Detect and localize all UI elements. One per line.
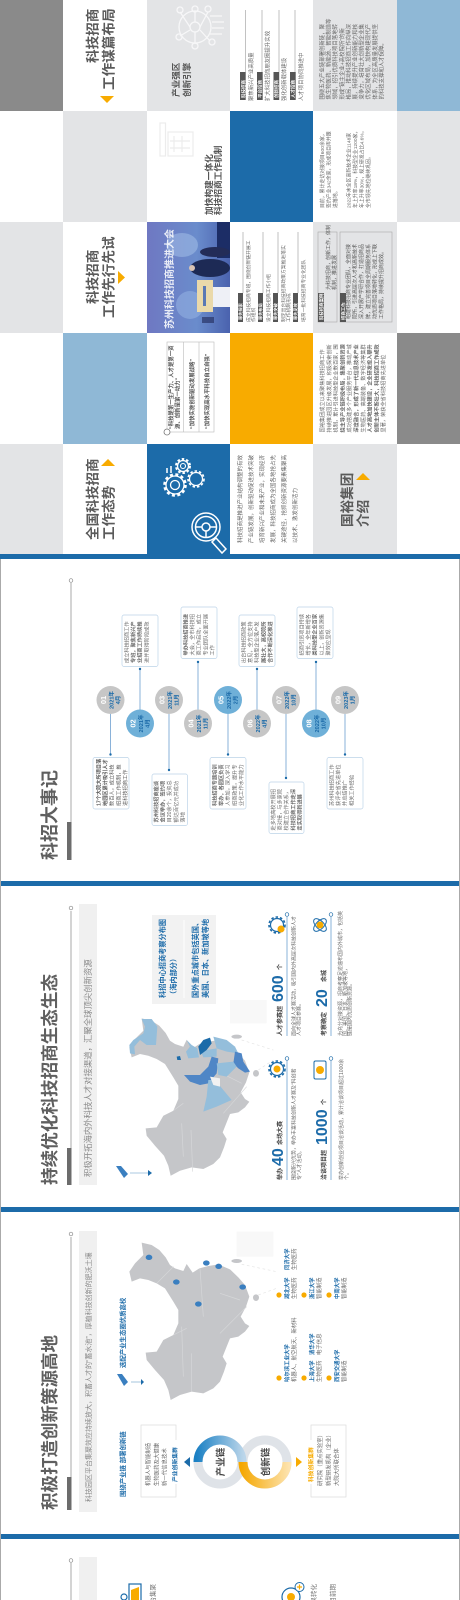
- quote panel: 三句话: [164, 342, 214, 435]
- event card 07: 科技招商工作走深: [289, 788, 297, 830]
- event card 03: [152, 774, 188, 826]
- list: 先行先试 four items: 制定出台科技招商政策方案推进落实: [280, 245, 287, 322]
- text block: 谋篇布局: 优化区域布局，加快构建现代产: [364, 24, 372, 100]
- panel: 加快构建一体化科技招商工作机制: [160, 123, 223, 215]
- text block: 谋篇布局: 的科技支撑和人才保障。: [377, 40, 385, 100]
- section: 持续优化科技招商生态: [40, 904, 354, 1185]
- node 08: [302, 710, 330, 738]
- panel: 先行先试案例: 招商工作: [340, 302, 347, 320]
- icon: atom: [312, 917, 328, 933]
- stat: 考察确定: 考察确定: [320, 1012, 328, 1036]
- node 05: [214, 686, 242, 714]
- box: 科技创新集群: 大院大所联合体: [333, 1448, 341, 1486]
- university list: 清华大学: [308, 1333, 316, 1355]
- arrow: blue left: [184, 1457, 190, 1467]
- panel: 先行先试案例: 深入开展产学研合作，打造招商品: [358, 244, 365, 319]
- subtitle strip: 积极开拓海内外科技人才对接渠道，汇聚全球顶尖创新资源: [83, 959, 93, 1177]
- node 09: [331, 686, 359, 714]
- heading: 科技招商工作先行先试: [84, 236, 125, 318]
- icon: gear with star: [269, 917, 285, 933]
- stat: 洽谈项目: 个。: [345, 1170, 351, 1180]
- title: 积极打造创新策源高地: [40, 1335, 60, 1510]
- event card 02: 进并取得阶段成效: [142, 621, 150, 663]
- node 03: 2021年: [166, 691, 174, 709]
- box: 科技创新集群: 研究院（重点实验室）: [316, 1432, 324, 1486]
- chain diagram: [184, 1440, 302, 1484]
- node 01: [96, 686, 124, 714]
- stat: 考察确定: 国、美国、日本、新加坡等地，: [342, 966, 349, 1036]
- university list: 湖北大学: [283, 1277, 291, 1299]
- panel: 产业强区创新引擎: [170, 6, 224, 97]
- section: 科招大事记: [40, 579, 363, 860]
- event card 09: [327, 758, 363, 809]
- map: 高校分布: [117, 1232, 277, 1400]
- text block: 国裕集团说明: 生物医药、高端装备、数字经济等集群: [359, 344, 367, 432]
- event card 09: 并总结推广: [341, 780, 349, 806]
- panel: 产业强区创新引擎: 创新引擎: [181, 62, 192, 97]
- event card 04: [181, 607, 217, 658]
- node 03: [155, 686, 183, 714]
- box: 产业创新集群: 产业创新集群: [171, 1447, 179, 1482]
- list: 产业强区 four items: 平台招商: [256, 80, 264, 98]
- stat: 举办大赛: 举办: [276, 1168, 284, 1180]
- box: 产业创新集群: [141, 1425, 179, 1497]
- icon: circle plus: [282, 1582, 304, 1600]
- university list: 生物医药: [290, 1277, 298, 1299]
- box: 产业创新集群: 机器人与智能制造: [144, 1442, 152, 1486]
- heading: 国裕集团介绍: 国裕集团: [339, 473, 355, 527]
- panel: 先行先试案例: 科技招商案例: [318, 293, 325, 320]
- event card 05: [210, 758, 246, 809]
- event card 08: 以上，创新资源集: [317, 613, 325, 656]
- text block: 谋篇布局: 焦生物医药、新能源、智能制造等: [325, 18, 333, 100]
- stat: 洽谈项目: [314, 1057, 351, 1180]
- stat: 考察确定: 余城: [320, 970, 328, 982]
- list: 先行先试 four items: 作组织: [250, 307, 257, 322]
- university list: 哈尔滨工业大学: [283, 1344, 291, 1382]
- text block: 谋篇布局: 围绕五大产业链部署创新链，聚: [318, 23, 326, 100]
- text block: 国裕集团说明: 深度融合，形成了新一代信息技术产业: [352, 344, 360, 432]
- node 07: [272, 686, 300, 714]
- event card 01: 地园区累计吸引人才: [101, 759, 109, 806]
- quote panel: 三句话: 源、创新是第一动力”: [173, 377, 181, 429]
- node 03: 11月: [174, 694, 180, 706]
- stat: 洽谈项目: 举办创新创业项目洽谈活动，累计洽谈项目超过1000余: [338, 1059, 345, 1180]
- event card 04: 商工作启动，成立: [195, 614, 203, 656]
- box: 科技创新集群: 科技创新集群: [307, 1447, 315, 1482]
- event card 06: 科技型企业落户发: [253, 621, 261, 663]
- event card 08: 招商引资项目持续: [298, 614, 306, 656]
- stat: 举办大赛: 余场大赛: [276, 1121, 284, 1145]
- text block: 谋篇布局: 展，持续提升产业创新能力和核: [351, 23, 359, 100]
- section: 底部栏目: [69, 1557, 337, 1600]
- quote panel: 三句话: “加快实现高水平科技自立自强”: [203, 353, 211, 429]
- icon: map pin with arrow: [116, 1166, 152, 1178]
- event card 01: 数百人，成立科技: [108, 764, 116, 806]
- node 05: 2月: [232, 696, 240, 704]
- text block: 全国态势: 科技招商是推进产业结构调整的有效: [236, 454, 244, 543]
- university list: 西安交通大学: [333, 1349, 341, 1382]
- text block: 国裕集团说明: 人才高地加快建设，企业研发投入攀升: [366, 344, 374, 432]
- title rule: [67, 579, 73, 860]
- panel: 先行先试案例: 工作格局，持续提升招商成效。: [378, 249, 385, 319]
- text block: 国裕集团说明: 创新主体不断壮大，科技招商工作成效: [372, 343, 380, 432]
- event card 03: 苏州科技招商座谈: [152, 780, 160, 822]
- section dividers: [0, 554, 460, 1539]
- event card 05: 举办，各园区负责: [217, 764, 225, 806]
- node 05: 05: [216, 696, 226, 704]
- node 07: 07: [274, 696, 284, 704]
- legend panel: [152, 915, 216, 1004]
- event card 02: [122, 615, 158, 666]
- text block: 国裕集团说明: 国裕集团成立以来聚焦科技招商工作: [318, 349, 326, 432]
- text block: 国裕集团说明: 显著，荣获全省科技招商先进单位: [379, 355, 387, 432]
- node 08: 2022年: [313, 714, 321, 733]
- heading: 国裕集团介绍: [339, 473, 371, 527]
- event card 08: 聚效应显现: [324, 630, 332, 656]
- event card 01: 17个大院大所项目落: [94, 758, 102, 806]
- timeline connectors: [109, 661, 346, 779]
- event card 06: 出台科技招商政策: [240, 621, 248, 663]
- icon: clipboard: [160, 123, 193, 156]
- node 06: 06: [246, 719, 254, 728]
- grid background: intro section: [0, 0, 460, 555]
- list: 产业强区 four items: 科技招商: [240, 80, 247, 98]
- list: 先行先试 four items: 率先布局: [257, 303, 264, 320]
- node 02: [126, 710, 154, 738]
- node 01: 4月: [115, 696, 122, 704]
- stat: 人才参赛: 面向全球人才赛活动，吸引国内外高层次科技创新人才: [290, 916, 298, 1036]
- heading: 科技招商工作先行先试: 科技招商: [84, 250, 100, 304]
- list: 产业强区 four items: [240, 10, 305, 101]
- node 07: 10月: [290, 694, 298, 706]
- panel: 先行先试案例: 院所，引进高层次人才和高新技术: [352, 244, 359, 319]
- node 04: 04: [186, 719, 196, 728]
- event card 07: 走实取得新进展: [295, 793, 303, 830]
- box: 产业创新集群: 生物医药及大健康: [152, 1442, 160, 1486]
- list: 先行先试 four items: 率先探索: [237, 303, 244, 320]
- university list: 机器人、航空航天、新材料: [290, 1317, 298, 1382]
- heading: 科技招商工作先行先试: 工作先行先试: [100, 236, 116, 318]
- quote panel: 三句话: “加快实施创新驱动发展战略”: [188, 359, 196, 429]
- text block: 国裕集团说明: 绕主导产业链积极布局，集聚创新资源: [338, 343, 346, 432]
- stat: 举办大赛: 40: [270, 1148, 287, 1166]
- event card 01: 进科技招商工作: [121, 770, 129, 806]
- map: 招商考察分布: [116, 1000, 273, 1178]
- list: 产业强区 four items: 创新招商: [273, 80, 280, 98]
- university list: 智能制造: [340, 1360, 348, 1382]
- university list: 同济大学: [283, 1248, 291, 1270]
- title: 持续优化科技招商生态生态: [40, 973, 60, 1185]
- title rule: [67, 1232, 73, 1510]
- text block: 全国态势: 以技术、激发创新活力: [291, 488, 299, 543]
- stat: 举办大赛: [269, 1057, 303, 1180]
- list: 产业强区 four items: 人才招商: [290, 80, 296, 98]
- stat: 考察确定: 20: [314, 989, 331, 1007]
- section: 积极打造创新策源高地: [40, 1231, 348, 1512]
- university list: 智能制造: [340, 1277, 348, 1299]
- icon: magnifier: [192, 513, 226, 553]
- event card 04: 大会，全市科技招: [188, 614, 196, 656]
- node 05: 2022年: [225, 691, 233, 709]
- icon: gear: [269, 1061, 285, 1077]
- event card 07: 赴多地高校开展招: [269, 789, 277, 830]
- list: 先行先试 four items: 设立科技招商工作小组: [265, 274, 272, 322]
- event card 03: 会议举办，签约项: [159, 780, 167, 822]
- stat: 考察确定: [312, 911, 354, 1036]
- legend panel: 美国、日本、新加坡等地: [201, 918, 210, 998]
- heading: 科技招商工作谋篇布局: [84, 8, 116, 103]
- text block: 全国态势: 产业链发展，创新驱动促进技术突破: [247, 454, 255, 543]
- list: 产业强区 four items: 强化创新载体建设: [280, 57, 288, 101]
- event card 01: [93, 758, 129, 809]
- node 04: 11月: [202, 718, 210, 729]
- event card 02: 专班，聚焦新兴产: [129, 621, 137, 663]
- icon: door: [121, 1584, 141, 1600]
- text block: 工作机制说明: 签约产业342余家，形成项目库并跟: [326, 131, 333, 208]
- university list: 电子信息: [315, 1333, 323, 1355]
- heading: 全国科技招商工作态势: [84, 458, 116, 540]
- event card 02: 业招商工作持续推: [136, 621, 144, 663]
- event card 08: 增长，全年新增各: [304, 613, 312, 656]
- heading: 全国科技招商工作态势: 工作态势: [100, 485, 116, 540]
- subtitle strip: [79, 1557, 97, 1600]
- panel: 先行先试案例: 为科技招商，创新工作，体制: [325, 225, 332, 290]
- node 09: 09: [334, 696, 342, 704]
- event card 09: 相关工作经验: [347, 774, 355, 806]
- title: 科招大事记: [40, 770, 60, 860]
- list: 产业强区 four items: 聚焦新兴产业高质量: [247, 52, 255, 101]
- text block: 谋篇布局: 体系，为全区高质量发展提供坚: [371, 23, 379, 100]
- university list: 浙江大学: [308, 1277, 316, 1299]
- event card 03: 额达百亿元并成功: [172, 781, 180, 822]
- text block: 国裕集团说明: 成功搭建多个产业服务平台，推动产城: [345, 343, 353, 432]
- event card 06: [239, 615, 275, 666]
- event card 09: 获评全省先进单位: [334, 764, 342, 806]
- chain heading: 围绕产业链: 围绕产业链 部署创新链: [118, 1431, 127, 1497]
- text block: 全国态势: 发展，科技招商成为全国各地抢占先: [269, 454, 277, 543]
- chain heading: 选配产业生态圈: 选配产业生态圈优质高校: [118, 1297, 127, 1368]
- list: 产业强区 four items: 扩大科技招商朋友圈提升实效: [264, 30, 272, 101]
- heading: 科技招商工作谋篇布局: 工作谋篇布局: [100, 8, 116, 90]
- node 06: [243, 710, 271, 738]
- panel: 先行先试案例: 牌，建立完善项目全周期服务体系: [365, 244, 372, 319]
- text block: 谋篇布局: 竞争力，培育壮大创新型企业集: [358, 23, 366, 100]
- panel: blue icons gears and magnifier: [164, 459, 226, 553]
- university list: 生物医药: [290, 1248, 298, 1270]
- list: 先行先试 four items: 率先突破: [272, 302, 279, 320]
- event card 07: 校建立合作关系，: [282, 789, 290, 830]
- event card 06: 展壮大，高校院所: [259, 621, 267, 663]
- event card 05: 业化工作水平能力: [237, 764, 245, 806]
- chain diagram: 产业链: [215, 1447, 227, 1476]
- university list: 中南大学: [333, 1277, 341, 1299]
- text block: 工作机制说明: 进落地。: [332, 188, 339, 208]
- node 02: 02: [128, 719, 138, 728]
- stat: 人才参赛: 个: [277, 964, 284, 970]
- heading: 国裕集团介绍: 介绍: [355, 500, 371, 527]
- text block: 工作机制说明: 年上升率18%，科技型企业1200家，: [352, 129, 359, 208]
- heading: 科技招商工作谋篇布局: 科技招商: [84, 9, 100, 63]
- event card 03: 落地: [178, 812, 186, 822]
- photo: 招商推进大会: [147, 222, 230, 333]
- event card 06: 意见，全方位支持: [246, 621, 254, 663]
- list: 先行先试 four items: 率先见效: [292, 302, 299, 320]
- event card 04: 举办科技招商推进: [182, 613, 190, 656]
- panel: 产业强区创新引擎: 产业强区: [170, 62, 181, 97]
- text block: 谋篇布局: 领域，招引优质科技项目落地转: [331, 23, 339, 100]
- panel: 加快构建一体化科技招商工作机制: 科技招商工作机制: [212, 145, 223, 215]
- list: 产业强区 four items: 人才项目协同推进中: [297, 52, 305, 101]
- panel: 先行先试案例: [318, 225, 392, 322]
- node 08: 08: [304, 719, 314, 728]
- stat: 人才参赛: [269, 913, 302, 1036]
- box: 科技创新集群: [307, 1425, 346, 1497]
- text block: 国裕集团说明: 机制，累计引进科技型企业数百家，围: [332, 344, 340, 432]
- node 01: 01: [99, 696, 108, 704]
- event card 08: [297, 607, 333, 658]
- box: 科技创新集群: 新型研发机构（企业）: [324, 1432, 332, 1486]
- event card 08: 类科技型企业百家: [311, 613, 319, 656]
- event card 07: 商对接，与多家院: [276, 788, 284, 830]
- event card 05: 科技招商专题培训: [210, 764, 218, 806]
- title rule: [67, 906, 73, 1185]
- photo: 招商推进大会: 苏州科技招商推进大会: [163, 229, 176, 329]
- list: 先行先试 four items: [237, 232, 307, 322]
- stat: 洽谈项目: 1000: [314, 1109, 331, 1145]
- node 06: 2022年: [254, 714, 262, 733]
- legend panel: 国外重点城市包括英国、: [191, 919, 200, 998]
- event card 01: 招商工作机制，推: [114, 764, 122, 806]
- icon: gears: [164, 459, 204, 496]
- list: 先行先试 four items: 培育一批科技招商专业化团队: [300, 259, 307, 322]
- panel: 先行先试案例: 机制，推进发展: [331, 255, 338, 290]
- node 02: 4月: [144, 719, 152, 728]
- text block: 工作机制说明: 全市领先地位继续巩固。: [365, 154, 372, 208]
- stat: 考察确定: 链接国内优质创新资源。: [347, 981, 354, 1036]
- event card 04: 工作: [208, 645, 216, 656]
- node 02: 2021年: [137, 714, 145, 733]
- university list: 上海大学: [308, 1360, 316, 1382]
- node 08: 10月: [320, 718, 328, 729]
- heading: 全国科技招商工作态势: 全国科技招商: [84, 458, 100, 540]
- stat: 人才参赛: 人才参赛超: [276, 1006, 284, 1036]
- text block: 谋篇布局: 形成“链主企业+高校院所”的新: [338, 27, 346, 100]
- event card 05: 招商政策，提升专: [230, 764, 238, 806]
- university list: [276, 1248, 348, 1382]
- node 07: 2022年: [283, 691, 291, 709]
- node 06: 4月: [262, 719, 268, 728]
- event card 04: 专业团队全面开展: [201, 614, 209, 656]
- text block: 工作机制说明: 2022年末全区高新技术企业1148家: [345, 133, 352, 208]
- icons: orange stars: [276, 1292, 332, 1381]
- box: 产业创新集群: 新一代信息技术: [161, 1448, 169, 1486]
- event card 06: 合作不断深化推进: [266, 621, 274, 663]
- node 09: 2023年: [342, 691, 350, 709]
- stat: 举办大赛: 围绕新兴优势，举办丰富科技创新人才赛及“科创者: [290, 1068, 298, 1180]
- event card 03: 目20余个，投资总: [165, 780, 173, 822]
- text block: 国裕集团说明: 持续推进园区升级发展，积极探索创新: [325, 344, 333, 432]
- icon: badge: [314, 1061, 326, 1079]
- text block: 谋篇布局: 格局，推动科技招商工作向纵深: [344, 23, 352, 100]
- text block: 全国态势: 培育新兴产业和未来产业，实现经济: [258, 454, 266, 543]
- university list: 生物医药: [315, 1360, 323, 1382]
- node 03: 03: [158, 696, 166, 704]
- legend panel: （海内部分）: [169, 955, 178, 998]
- legend panel: 科招中心招商考察分布图: [158, 919, 167, 998]
- stat: 人才参赛: 人才项目参赛。: [296, 1001, 302, 1036]
- list: 先行先试 four items: 成立科技招商专班，围绕创新链开展工: [245, 240, 252, 322]
- node 04: [184, 710, 212, 738]
- text block: 工作机制说明: 年上升率30%，规上研发占比4.6%，: [359, 128, 366, 208]
- subtitle strip: [79, 904, 97, 1185]
- arrow: orange right: [296, 1457, 302, 1467]
- text block: 全国态势: 关键途径，抢抓创新资源要素集聚高: [280, 454, 288, 543]
- event card 07: [269, 782, 304, 834]
- university list: 智能制造: [315, 1277, 323, 1299]
- quote panel: 三句话: “科技是第一生产力、人才是第一资: [167, 345, 175, 429]
- panel: 先行先试案例: 组建科技招商专业团队，全面对接: [345, 244, 352, 319]
- text block: 工作机制说明: 目前，累计走访对接项目600余家，: [319, 131, 326, 208]
- event card 02: 成立科技招商工作: [122, 621, 130, 663]
- stat: 考察确定: 为充分对接资源，招商考察足迹遍布国内外城市，包括英: [337, 911, 344, 1036]
- stat: 举办大赛: 专”人才活动。: [296, 1148, 303, 1180]
- chain diagram: 创新链: [260, 1447, 272, 1476]
- panel: 先行先试案例: 动优质项目落地转化，形成上下联: [371, 244, 378, 319]
- event card 09: 苏州科技招商工作: [328, 764, 336, 806]
- subtitle strip: [79, 1231, 97, 1512]
- icon: map pin with arrow: [117, 1374, 144, 1386]
- panel: 加快构建一体化科技招商工作机制: 加快构建一体化: [203, 154, 214, 215]
- stat: 洽谈项目: 个: [321, 1099, 328, 1105]
- node 09: 1月: [350, 696, 356, 704]
- title rule: [69, 1559, 73, 1600]
- event card 05: 人参加，深入学习: [224, 764, 232, 806]
- node 04: 2021年: [195, 714, 203, 733]
- list: 先行先试 four items: 工作机制形成: [285, 293, 292, 322]
- subtitle strip: 科技园区平台集聚效应持续放大，积蓄人才的“蓄水池”，厚植科技创新的肥沃土壤: [84, 1252, 93, 1502]
- stat: 人才参赛: 600: [270, 975, 287, 1002]
- node 01: 2021年: [108, 691, 116, 709]
- stat: 洽谈项目: 洽谈项目超: [320, 1150, 328, 1180]
- icon: innovation bulb: [176, 6, 224, 49]
